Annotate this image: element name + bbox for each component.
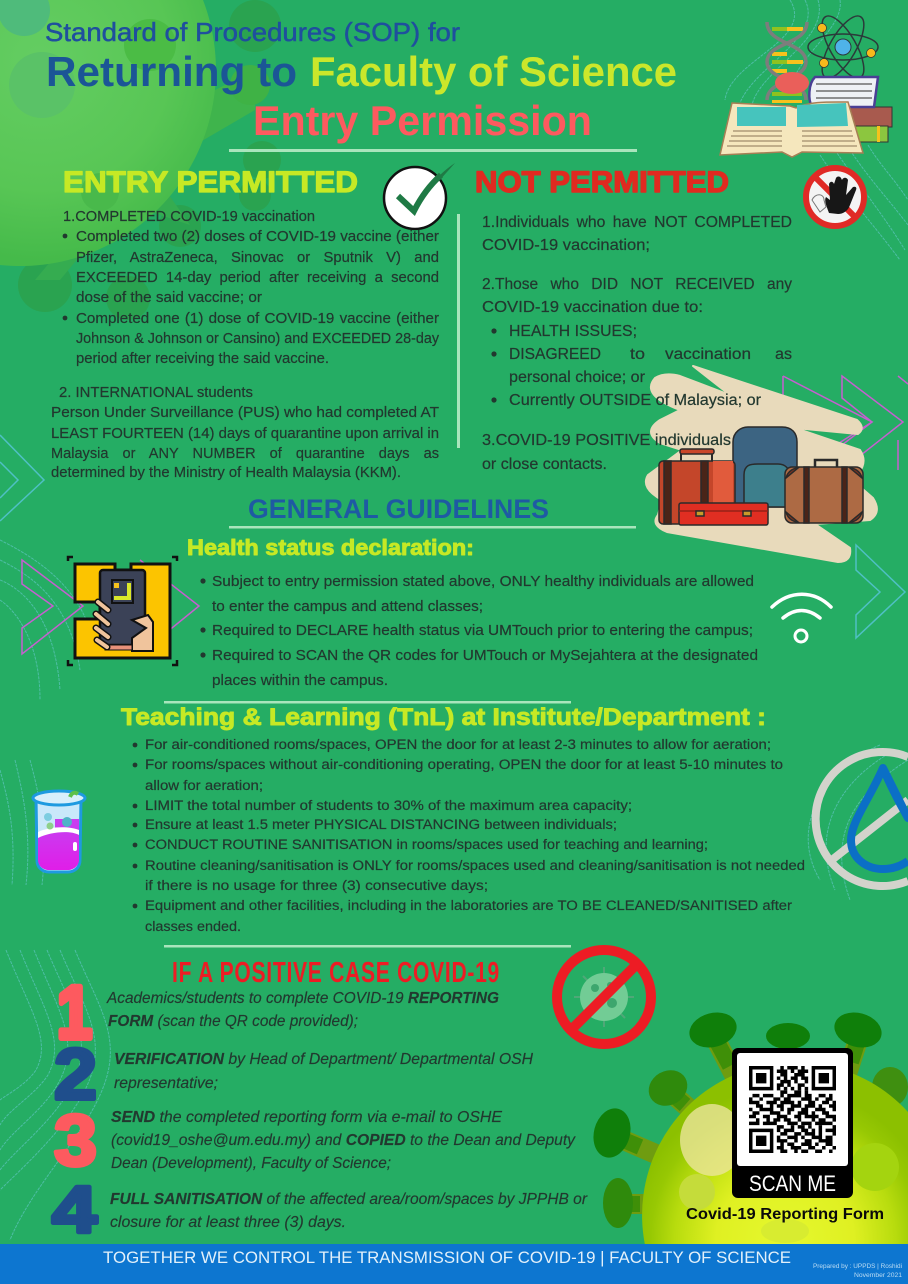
icon: no virus bbox=[557, 950, 651, 1044]
panel: not permitted text: or close contacts. bbox=[482, 456, 607, 473]
panel: teaching and learning bullets: if there is no usage for three (3) consecutive days; bbox=[145, 878, 488, 893]
panel: entry permitted text bbox=[51, 209, 440, 481]
icon: wifi bbox=[772, 594, 831, 642]
panel: entry permitted text: Completed two (2) doses of COVID-19 vaccine (either bbox=[76, 229, 439, 245]
panel: health status bullets: Required to SCAN the QR codes for UMTouch or MySejahtera at the designated bbox=[212, 648, 758, 664]
icon: water drop crossed bbox=[816, 752, 908, 886]
panel: not permitted text: 1.Individuals who have NOT COMPLETED bbox=[482, 214, 792, 231]
panel: not permitted text: to bbox=[630, 346, 645, 363]
panel: not permitted text: COVID-19 vaccination due to: bbox=[482, 299, 703, 316]
panel: teaching and learning bullets: For air-conditioned rooms/spaces, OPEN the door for at least 2-3 minutes to allow for aeration; bbox=[145, 737, 771, 752]
panel: teaching and learning bullets: For rooms/spaces without air-conditioning operating, OPEN the door for at least 5-10 minutes to bbox=[145, 757, 783, 772]
QR code card bbox=[732, 1048, 853, 1198]
panel: entry permitted text: 1.COMPLETED COVID-19 vaccination bbox=[63, 209, 315, 225]
numbers: 4 bbox=[52, 1172, 97, 1246]
title: Entry Permission bbox=[253, 97, 592, 144]
numbers: 1 bbox=[57, 971, 92, 1054]
panel: not permitted text: vaccination bbox=[665, 346, 751, 363]
panel: positive case steps bbox=[106, 990, 588, 1231]
panel: teaching and learning bullets: allow for aeration; bbox=[145, 778, 263, 793]
panel: entry permitted text: period after receiving the said vaccine. bbox=[76, 351, 329, 367]
illustration: large virus bbox=[588, 1007, 908, 1244]
panel: not permitted text: personal choice; or bbox=[509, 369, 645, 386]
QR code card: SCAN ME bbox=[749, 1171, 836, 1196]
panel: teaching and learning bullets: LIMIT the total number of students to 30% of the maximum area capacity; bbox=[145, 798, 632, 813]
heading: general guidelines: GENERAL GUIDELINES bbox=[248, 494, 549, 524]
panel: teaching and learning bullets: Ensure at least 1.5 meter PHYSICAL DISTANCING between individuals; bbox=[145, 817, 617, 832]
title bbox=[45, 17, 677, 144]
panel: teaching and learning bullets bbox=[133, 737, 805, 934]
panel: teaching and learning bullets: Equipment and other facilities, including in the laboratories are TO BE CLEANED/SANITISED after bbox=[145, 898, 793, 913]
numbers: 3 bbox=[54, 1101, 97, 1181]
panel: entry permitted text: determined by the Ministry of Health Malaysia (KKM). bbox=[51, 465, 401, 481]
panel: not permitted text: Currently OUTSIDE of Malaysia; or bbox=[509, 392, 761, 409]
panel: entry permitted text: dose of the said vaccine; or bbox=[76, 290, 262, 306]
panel: positive case steps: FORM (scan the QR code provided); bbox=[108, 1013, 358, 1030]
panel: teaching and learning bullets: Routine cleaning/sanitisation is ONLY for rooms/spaces used and cleaning/sanitisation is not needed bbox=[145, 858, 805, 873]
panel: health status bullets: places within the campus. bbox=[212, 673, 388, 689]
panel: positive case steps: closure for at least three (3) days. bbox=[110, 1214, 346, 1231]
panel: positive case steps: Academics/students to complete COVID-19 REPORTING bbox=[106, 990, 499, 1007]
panel: not permitted text: HEALTH ISSUES; bbox=[509, 323, 637, 340]
footer bar: Prepared by : UPPDS | Roshidi bbox=[813, 1263, 902, 1270]
panel: health status bullets: Required to DECLARE health status via UMTouch prior to entering the campus; bbox=[212, 623, 753, 639]
panel: health status bullets bbox=[200, 574, 758, 689]
panel: positive case steps: representative; bbox=[114, 1075, 218, 1092]
heading: entry permitted: ENTRY PERMITTED bbox=[63, 166, 358, 199]
panel: not permitted text: DISAGREED bbox=[509, 346, 601, 363]
label: covid-19 reporting form: Covid-19 Reporting Form bbox=[686, 1206, 884, 1223]
panel: entry permitted text: Johnson & Johnson or Cansino) and EXCEEDED 28-day bbox=[76, 331, 440, 347]
panel: not permitted text: COVID-19 vaccination; bbox=[482, 237, 650, 254]
numbers: 2 bbox=[54, 1035, 97, 1115]
heading: teaching and learning: Teaching & Learning (TnL) at Institute/Department : bbox=[121, 704, 766, 731]
footer bar: November 2021 bbox=[854, 1272, 902, 1279]
panel: positive case steps: (covid19_oshe@um.edu.my) and COPIED to the Dean and Deputy bbox=[111, 1132, 576, 1149]
panel: entry permitted text: Completed one (1) dose of COVID-19 vaccine (either bbox=[76, 311, 439, 327]
panel: health status bullets: Subject to entry permission stated above, ONLY healthy individuals are allowed bbox=[212, 574, 754, 590]
panel: entry permitted text: Person Under Surveillance (PUS) who had completed AT bbox=[51, 405, 439, 421]
decorative brush blob bbox=[646, 366, 877, 562]
icon: stop hand bbox=[806, 168, 864, 226]
panel: positive case steps: Dean (Development), Faculty of Science; bbox=[111, 1155, 391, 1172]
icon: luggage bbox=[659, 427, 863, 525]
panel: teaching and learning bullets: classes ended. bbox=[145, 919, 241, 934]
title: Faculty of Science bbox=[310, 48, 677, 95]
panel: not permitted text bbox=[482, 214, 792, 473]
numbers bbox=[52, 971, 97, 1246]
panel: entry permitted text: LEAST FOURTEEN (14) days of quarantine upon arrival in bbox=[51, 426, 439, 442]
panel: positive case steps: VERIFICATION by Head of Department/ Departmental OSH bbox=[114, 1051, 533, 1068]
panel: not permitted text: 3.COVID-19 POSITIVE individuals bbox=[482, 432, 731, 449]
icon: science books, DNA and atom bbox=[720, 10, 892, 157]
icon: beaker bbox=[33, 791, 85, 872]
icon: phone in hand bbox=[68, 557, 177, 665]
panel: entry permitted text: 2. INTERNATIONAL students bbox=[59, 385, 253, 401]
panel: entry permitted text: Malaysia or ANY NUMBER of quarantine days as bbox=[51, 446, 439, 462]
footer bar bbox=[0, 1244, 908, 1284]
panel: teaching and learning bullets: CONDUCT ROUTINE SANITISATION in rooms/spaces used for teaching and learning; bbox=[145, 837, 708, 852]
panel: entry permitted text: EXCEEDED 14-day period after receiving a second bbox=[76, 270, 439, 286]
icon: check mark bbox=[384, 163, 455, 229]
footer bar: TOGETHER WE CONTROL THE TRANSMISSION OF COVID-19 | FACULTY OF SCIENCE bbox=[103, 1248, 791, 1267]
heading: if a positive case: IF A POSITIVE CASE COVID-19 bbox=[172, 957, 500, 989]
panel: not permitted text: as bbox=[775, 346, 792, 363]
title: Returning to bbox=[46, 48, 297, 95]
heading: health status declaration: Health status declaration: bbox=[187, 535, 474, 560]
title: Standard of Procedures (SOP) for bbox=[45, 17, 460, 47]
heading: not permitted: NOT PERMITTED bbox=[475, 166, 729, 199]
panel: positive case steps: SEND the completed reporting form via e-mail to OSHE bbox=[111, 1109, 502, 1126]
panel: entry permitted text: Pfizer, AstraZeneca, Sinovac or Sputnik V) and bbox=[76, 250, 439, 266]
panel: positive case steps: FULL SANITISATION of the affected area/room/spaces by JPPHB or bbox=[110, 1191, 588, 1208]
panel: health status bullets: to enter the campus and attend classes; bbox=[212, 599, 483, 615]
panel: not permitted text: 2.Those who DID NOT RECEIVED any bbox=[482, 276, 792, 293]
